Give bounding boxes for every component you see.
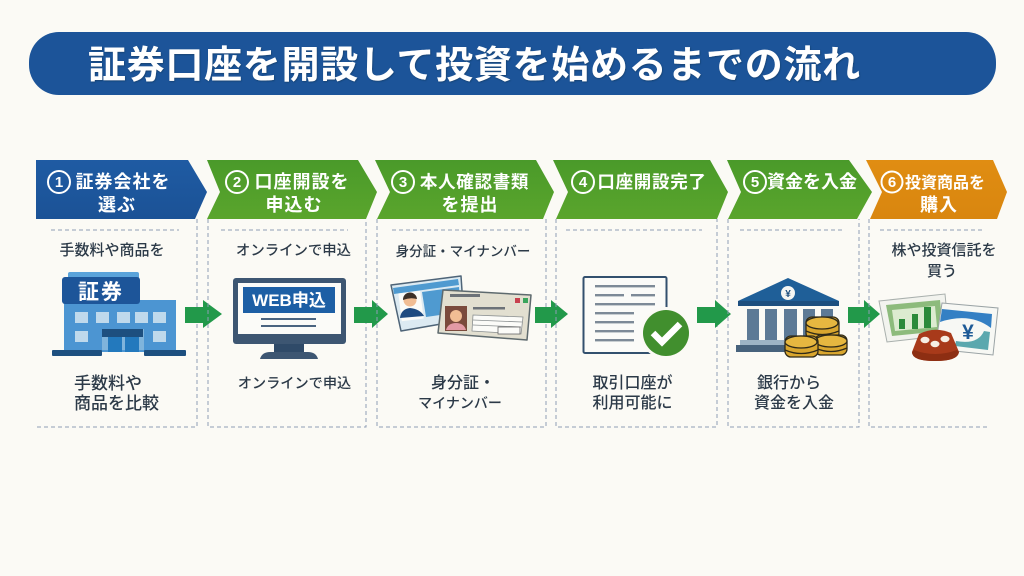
icon: monitor with web application: WEB申込 (252, 290, 326, 310)
step 5 frame (728, 219, 859, 427)
step 1 bottom text: 商品を比較 (74, 394, 159, 413)
step 1 bottom text: 手数料や (74, 374, 142, 393)
step 6 top text: 株や投資信託を (891, 242, 997, 259)
step 1 bottom text (74, 374, 159, 413)
step 2 header: 申込む (266, 195, 322, 215)
panel: step 3 (375, 160, 554, 427)
step 2 top text: オンラインで申込 (236, 242, 351, 259)
icon: securities office building: 証券 (78, 281, 124, 304)
icon: bank with coins: ¥ (785, 289, 791, 300)
step 2 header (207, 160, 377, 219)
step 3 bottom text (418, 374, 502, 411)
step 1 frame (36, 219, 197, 427)
step 6 header: 購入 (920, 195, 958, 215)
icon: monitor with web application (233, 278, 346, 359)
step 5 header (727, 160, 872, 219)
step 6 header (866, 160, 1007, 219)
step 3 top text: 身分証・マイナンバー (396, 244, 530, 259)
arrow 4 (697, 300, 731, 328)
icon: bank with coins (736, 278, 847, 357)
panel: step 5 (727, 160, 872, 427)
panel: step 6 (866, 160, 1007, 427)
panel: step 2 (207, 160, 377, 427)
step 5 header: 資金を入金 (767, 172, 857, 192)
step 4 bottom text: 利用可能に (592, 394, 673, 412)
step 2 header: 口座開設を (254, 172, 350, 192)
step 1 header: 1 (55, 174, 63, 191)
step 6 top text (891, 242, 997, 280)
arrow 1 (185, 300, 222, 328)
step 3 bottom text: マイナンバー (418, 395, 502, 411)
title banner: 証券口座を開設して投資を始めるまでの流れ (88, 45, 861, 87)
step 5 header: 5 (751, 174, 759, 191)
step 6 frame (869, 219, 990, 427)
step 6 header: 6 (888, 174, 896, 191)
step 6 header: 投資商品を (905, 173, 985, 192)
step 3 bottom text: 身分証・ (431, 374, 495, 392)
step 1 header: 選ぶ (98, 195, 136, 215)
step 3 frame (377, 219, 546, 427)
step 5 bottom text: 資金を入金 (754, 394, 834, 412)
step 3 header: を提出 (442, 194, 498, 215)
arrow 2 (354, 300, 388, 328)
step 4 bottom text (592, 373, 673, 412)
panel: step 1 (36, 160, 207, 427)
icon: identity cards (391, 276, 531, 340)
step 2 bottom text: オンラインで申込 (238, 376, 351, 392)
icon: securities office building (52, 272, 186, 356)
step 1 top text: 手数料や商品を (59, 242, 165, 259)
step 3 header: 3 (399, 174, 407, 191)
step 2 frame (208, 219, 366, 427)
step 3 header: 本人確認書類 (420, 172, 529, 192)
title banner (29, 32, 996, 95)
step 5 bottom text: 銀行から (757, 374, 821, 392)
arrow 5 (848, 300, 880, 328)
arrow 3 (535, 300, 568, 328)
step 4 header (553, 160, 728, 219)
step 2 header: 2 (233, 174, 241, 191)
icon: stock, yen certificate and investment product: ¥ (962, 321, 974, 344)
icon: document with check mark (584, 277, 692, 359)
step 3 header (375, 160, 554, 219)
step 4 header: 4 (579, 174, 588, 191)
step 6 top text: 買う (927, 263, 957, 280)
step 4 header: 口座開設完了 (597, 172, 707, 192)
step 5 bottom text (754, 374, 834, 412)
panel: step 4 (553, 160, 728, 427)
step 1 header: 証券会社を (76, 172, 170, 192)
step 1 header (36, 160, 207, 219)
step 4 bottom text: 取引口座が (592, 373, 673, 392)
step 4 frame (556, 219, 717, 427)
icon: stock, yen certificate and investment product (879, 294, 998, 361)
